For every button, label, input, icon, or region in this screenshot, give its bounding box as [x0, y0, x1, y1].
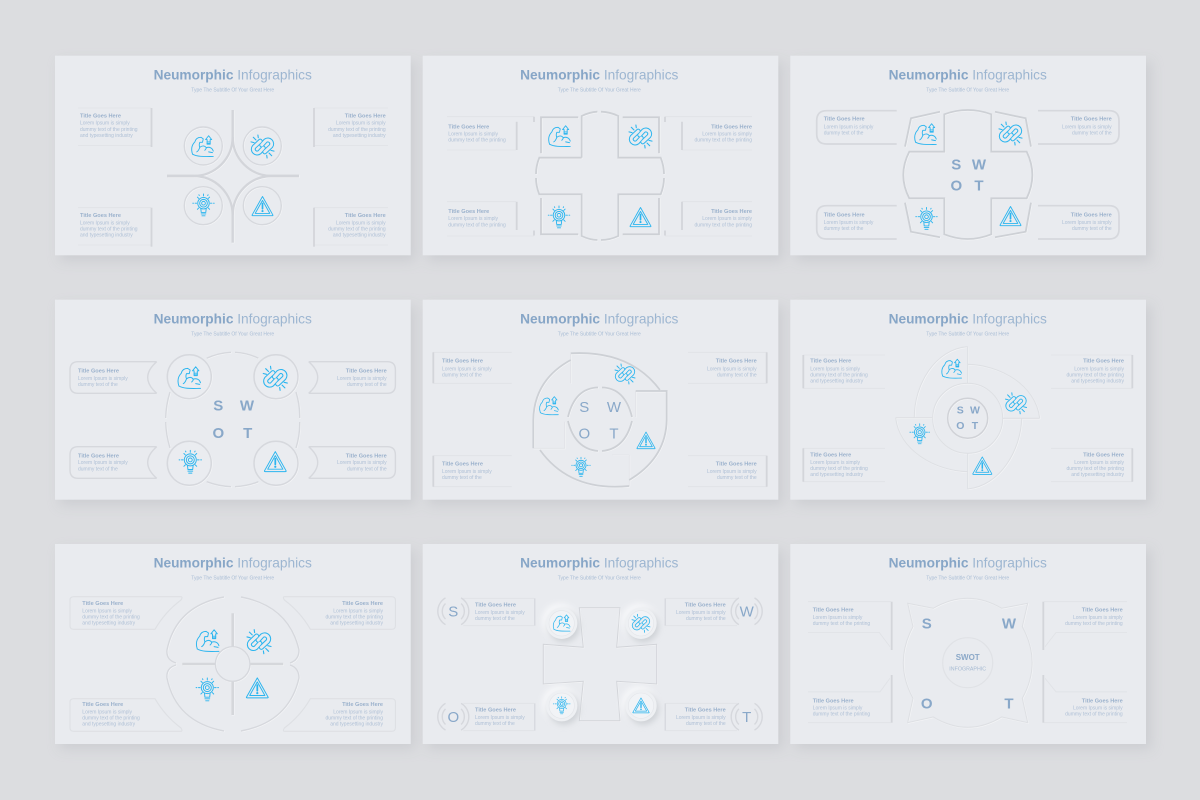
SWOT letters: O [921, 696, 933, 712]
text card: top right: dummy text of the printing [328, 127, 386, 133]
text card: bottom right: Lorem Ipsum is simply [702, 216, 752, 222]
text card: top left: Title Goes Here [442, 359, 483, 365]
SWOT letters [212, 398, 255, 442]
icon: muscle [540, 397, 558, 415]
text card: bottom left: dummy text of the [824, 226, 864, 232]
SWOT letters: T [609, 426, 619, 442]
center hub: INFOGRAPHIC [949, 666, 986, 672]
text card: bottom left: and typesetting industry [810, 472, 864, 478]
text card: top right [1043, 602, 1127, 650]
text card: bottom left: dummy text of the printing [82, 716, 140, 722]
text card: top right [283, 597, 395, 629]
text card: bottom left: dummy text of the [442, 475, 482, 481]
diagram: flared cross [543, 608, 657, 721]
button: bottom left [542, 686, 580, 725]
text card: top left: and typesetting industry [80, 133, 133, 139]
text card: top right: dummy text of the printing [1065, 621, 1123, 627]
heading: slide 3: Neumorphic Infographics [889, 68, 1047, 82]
text card: top left: Title Goes Here [813, 608, 854, 614]
text card: bottom left: Title Goes Here [810, 453, 851, 459]
text card: top right: Lorem Ipsum is simply [1073, 615, 1123, 621]
text card: bottom right [1051, 448, 1132, 482]
slide drop shadows [60, 62, 1151, 749]
letter badge: S [438, 598, 469, 625]
text card: top right [688, 352, 767, 383]
text card: bottom left [808, 675, 892, 723]
icon: idea bulb [916, 208, 937, 229]
letter badge: O: O [447, 709, 459, 726]
text card: top right: dummy text of the [347, 382, 387, 388]
text card: bottom right: dummy text of the printing [1066, 466, 1124, 472]
diagram: rounded cross with corner wedges [903, 110, 1032, 239]
text card: top left: dummy text of the printing [810, 372, 868, 378]
text card: top right: Title Goes Here [685, 603, 726, 609]
text card: bottom left [70, 699, 182, 731]
text card: top left: Title Goes Here [475, 603, 516, 609]
text card: bottom right: Lorem Ipsum is simply [337, 460, 387, 466]
text card: bottom right: Title Goes Here [711, 209, 752, 215]
text card: top right: and typesetting industry [1071, 378, 1124, 384]
letter badge: T: T [742, 709, 751, 726]
panel: slide 3 SWOT cross with wedges [790, 56, 1146, 255]
text card: bottom left: Lorem Ipsum is simply [78, 460, 128, 466]
text card: bottom right: Lorem Ipsum is simply [676, 715, 726, 721]
icon: warning [637, 432, 655, 449]
text card: top left: dummy text of the [78, 382, 118, 388]
text card: top left [433, 352, 512, 383]
icon: muscle [915, 124, 936, 145]
text card: bottom left [463, 703, 535, 731]
panel: slide 1 quarter-arc cross [55, 56, 411, 255]
SWOT letters [578, 399, 622, 442]
SWOT letters: T [243, 425, 252, 442]
text card: bottom left: Lorem Ipsum is simply [82, 710, 133, 716]
letter badge: T [731, 703, 762, 730]
text card: top left: dummy text of the printing [80, 127, 138, 133]
heading: slide 1: Neumorphic Infographics [154, 68, 312, 82]
icon: muscle [192, 136, 213, 157]
SWOT letters: O [578, 426, 590, 442]
text card: bottom right: dummy text of the [1072, 226, 1112, 232]
text card: bottom right: Title Goes Here [345, 213, 386, 219]
text card: bottom left: Title Goes Here [475, 708, 516, 714]
subtitle: slide 4: Type The Subtitle Of Your Great Here [191, 332, 274, 338]
letter badge: S: S [448, 604, 458, 621]
text card: bottom right [1043, 675, 1127, 723]
SWOT letters: W [607, 399, 622, 416]
panel: slide 7 divided circle [55, 544, 411, 744]
text card: top left: and typesetting industry [82, 620, 136, 626]
heading: slide 8: Neumorphic Infographics [520, 556, 679, 570]
text card: top left: Lorem Ipsum is simply [810, 366, 861, 372]
text card: top right: dummy text of the printing [1066, 372, 1124, 378]
text card: top right [1038, 111, 1119, 144]
text card: top right: Lorem Ipsum is simply [336, 121, 386, 127]
text card: bottom right [309, 447, 395, 478]
text card: top right: and typesetting industry [330, 620, 383, 626]
icon: warning [630, 208, 651, 227]
text card: bottom right: Title Goes Here [1071, 212, 1112, 218]
text card: bottom right: Title Goes Here [1082, 698, 1123, 704]
text card: bottom right: Title Goes Here [342, 702, 383, 708]
text card: bottom right: Title Goes Here [716, 462, 757, 468]
text card: top right: Lorem Ipsum is simply [676, 610, 726, 616]
text card: bottom right [314, 208, 388, 247]
diagram: cross outline and corner squares [536, 112, 664, 240]
text card: top right: Lorem Ipsum is simply [1062, 125, 1112, 131]
text card: top left [808, 602, 892, 650]
SWOT letters: W [972, 156, 987, 174]
icon: idea bulb [572, 457, 590, 476]
SWOT letters: W [1002, 616, 1017, 632]
SWOT letters: T [972, 420, 979, 432]
text card: top right: Title Goes Here [711, 124, 752, 130]
panel: slide 2 cross with square corners [423, 56, 778, 255]
text card: bottom right: Lorem Ipsum is simply [1062, 220, 1112, 226]
center hub [943, 638, 993, 688]
text card: top right: dummy text of the [717, 372, 757, 378]
text card: top left [78, 108, 152, 147]
text card: top right: Title Goes Here [1071, 117, 1112, 123]
text card: bottom left: Title Goes Here [82, 702, 123, 708]
text card: top right: Title Goes Here [1083, 359, 1124, 365]
text card: bottom left: Title Goes Here [442, 462, 483, 468]
text card: top right [665, 598, 737, 626]
heading: slide 7: Neumorphic Infographics [154, 556, 312, 570]
text card: top right: and typesetting industry [333, 133, 386, 139]
diagram: four-point star circle [903, 598, 1032, 727]
text card: bottom left: dummy text of the [475, 721, 515, 727]
SWOT letters [921, 616, 1017, 712]
diagram: four quarter arcs [167, 110, 299, 243]
icon: idea bulb [193, 194, 214, 216]
text card: bottom right: and typesetting industry [333, 232, 386, 238]
subtitle: slide 5: Type The Subtitle Of Your Great Here [558, 332, 641, 338]
text card: bottom left: Lorem Ipsum is simply [442, 469, 492, 475]
SWOT letters: S [213, 398, 223, 414]
SWOT letters: S [951, 156, 961, 174]
icon: muscle [549, 126, 570, 147]
text card: top left: Lorem Ipsum is simply [448, 131, 499, 137]
button: top right [621, 603, 659, 642]
diagram: dome, cross bars and hub [167, 597, 299, 731]
text card: top right: Title Goes Here [1082, 608, 1123, 614]
subtitle: slide 2: Type The Subtitle Of Your Great Here [558, 88, 641, 94]
text card: top left: Lorem Ipsum is simply [82, 609, 133, 615]
text card: bottom left: dummy text of the printing [810, 466, 868, 472]
panel: slide 6 SWOT pinwheel [790, 300, 1146, 500]
text card: bottom right: and typesetting industry [330, 721, 383, 727]
icon: broken link [615, 364, 635, 384]
text card: top right [665, 117, 752, 150]
text card: bottom right: dummy text of the [717, 475, 757, 481]
icon: broken link [1006, 393, 1026, 414]
text card: bottom right [1038, 206, 1119, 239]
text card: top right: dummy text of the [686, 616, 726, 622]
text card: top left [70, 362, 157, 393]
SWOT letters: S [957, 404, 964, 416]
text card: top left: Lorem Ipsum is simply [78, 376, 128, 382]
icon: broken link [999, 122, 1022, 145]
letter badge: W [731, 598, 762, 625]
text card: top left: Lorem Ipsum is simply [442, 366, 492, 372]
text card: bottom left: dummy text of the printing [448, 222, 506, 228]
text card: bottom left [447, 202, 534, 236]
text card: bottom right: Title Goes Here [1083, 453, 1124, 459]
icon: broken link [263, 366, 287, 390]
text card: top left: Title Goes Here [82, 601, 123, 607]
text card: top left [817, 111, 897, 144]
text card: bottom right: Lorem Ipsum is simply [1073, 706, 1123, 712]
panel: slide 8 cross with raised buttons [423, 544, 778, 744]
text card: top left: Lorem Ipsum is simply [813, 615, 863, 621]
panel: slide 5 SWOT ring with offset segments [423, 300, 778, 500]
SWOT letters: T [974, 178, 984, 194]
text card: top left: Title Goes Here [810, 359, 851, 365]
text card: bottom right: dummy text of the printing [1065, 712, 1123, 718]
text card: bottom left [817, 206, 897, 239]
text card: bottom right [665, 703, 737, 731]
text card: top right: Title Goes Here [345, 114, 386, 120]
SWOT letters: S [922, 616, 932, 632]
text card: top right: dummy text of the [1072, 131, 1112, 137]
text card: top right: Title Goes Here [346, 369, 387, 375]
text card: bottom left: and typesetting industry [82, 721, 136, 727]
text card: top right [309, 362, 395, 393]
heading: slide 9: Neumorphic Infographics [889, 556, 1047, 570]
subtitle: slide 3: Type The Subtitle Of Your Great Here [926, 88, 1009, 94]
text card: bottom left: and typesetting industry [80, 232, 133, 238]
icon: idea bulb [196, 678, 218, 701]
icon: warning [246, 678, 268, 698]
text card: bottom right: dummy text of the printing [328, 226, 386, 232]
text card: top left: dummy text of the [824, 131, 864, 137]
text card: bottom right: Lorem Ipsum is simply [336, 220, 386, 226]
letter badge: W: W [740, 604, 755, 621]
icon: muscle [178, 367, 200, 388]
text card: bottom right: dummy text of the printing [325, 716, 383, 722]
text card: bottom left: Lorem Ipsum is simply [475, 715, 525, 721]
text card: top left [70, 597, 182, 629]
text card: bottom left: dummy text of the printing [80, 226, 138, 232]
text card: top right: Lorem Ipsum is simply [337, 376, 387, 382]
center hub: SWOT [956, 653, 980, 662]
text card: bottom right: dummy text of the [347, 466, 387, 472]
SWOT letters: W [970, 404, 980, 416]
heading: slide 6: Neumorphic Infographics [889, 312, 1047, 326]
text card: bottom left: dummy text of the printing [813, 712, 870, 718]
text card: top left [463, 598, 535, 626]
text card: bottom right: dummy text of the printing [694, 222, 752, 228]
text card: bottom right: dummy text of the [686, 721, 726, 727]
text card: bottom right: Lorem Ipsum is simply [333, 710, 383, 716]
text card: bottom right: Title Goes Here [685, 708, 726, 714]
text card: top left: Title Goes Here [80, 114, 121, 120]
subtitle: slide 8: Type The Subtitle Of Your Great Here [558, 576, 641, 582]
text card: bottom right [688, 456, 767, 487]
text card: top right: dummy text of the printing [694, 138, 752, 144]
text card: bottom left [433, 456, 512, 487]
icon: warning [264, 452, 286, 472]
SWOT letters [950, 156, 987, 194]
icon: idea bulb [910, 424, 930, 444]
text card: top left [803, 355, 885, 388]
text card: bottom left: Lorem Ipsum is simply [448, 216, 499, 222]
text card: bottom left: Lorem Ipsum is simply [810, 460, 861, 466]
text card: bottom left: Title Goes Here [80, 213, 121, 219]
button: top left [542, 603, 580, 642]
SWOT letters [956, 404, 980, 432]
text card: top right: Lorem Ipsum is simply [707, 366, 757, 372]
panel: slide 9 SWOT star circle [790, 544, 1146, 744]
icon: warning [973, 457, 992, 474]
text card: bottom right: Lorem Ipsum is simply [707, 469, 757, 475]
text card: top right: Lorem Ipsum is simply [1074, 366, 1124, 372]
text card: bottom right: and typesetting industry [1071, 472, 1124, 478]
text card: top right: dummy text of the printing [325, 615, 383, 621]
icon: broken link [251, 135, 274, 158]
text card: top right [1051, 355, 1132, 388]
diagram: blob with four corner circles [166, 352, 300, 487]
text card: top left: dummy text of the [475, 616, 515, 622]
text card: top right: Title Goes Here [716, 359, 757, 365]
text card: bottom left: Title Goes Here [813, 698, 854, 704]
icon: warning [252, 197, 273, 216]
text card: bottom left: Lorem Ipsum is simply [80, 220, 130, 226]
text card: bottom left: dummy text of the [78, 466, 118, 472]
SWOT letters: W [240, 398, 255, 414]
text card: bottom left: Lorem Ipsum is simply [813, 706, 863, 712]
icon: broken link [629, 125, 652, 148]
diagram: pinwheel blades and hub [896, 347, 1040, 489]
text card: top left: Lorem Ipsum is simply [80, 121, 130, 127]
text card: top left: Title Goes Here [78, 369, 119, 375]
icon: idea bulb [548, 206, 570, 228]
subtitle: slide 9: Type The Subtitle Of Your Great Here [926, 576, 1009, 582]
heading: slide 4: Neumorphic Infographics [154, 312, 312, 326]
icon: idea bulb [179, 450, 202, 473]
text card: top left: and typesetting industry [810, 378, 864, 384]
text card: top left: Title Goes Here [448, 124, 489, 130]
text card: top left: dummy text of the printing [448, 138, 506, 144]
text card: bottom right: Title Goes Here [346, 453, 387, 459]
icon: warning [1000, 207, 1021, 226]
text card: top left: dummy text of the [442, 372, 482, 378]
SWOT letters: T [1004, 696, 1014, 712]
heading: slide 2: Neumorphic Infographics [520, 68, 679, 82]
text card: bottom left: Title Goes Here [78, 453, 119, 459]
subtitle: slide 6: Type The Subtitle Of Your Great Here [926, 332, 1009, 338]
subtitle: slide 1: Type The Subtitle Of Your Great Here [191, 88, 274, 94]
text card: bottom left [78, 208, 152, 247]
text card: top left: Title Goes Here [824, 117, 865, 123]
text card: top right: Lorem Ipsum is simply [333, 609, 383, 615]
icon: muscle [196, 630, 219, 651]
text card: top right: Lorem Ipsum is simply [702, 131, 752, 137]
button: bottom right [621, 686, 659, 725]
text card: bottom left: Title Goes Here [448, 209, 489, 215]
text card: top left: Lorem Ipsum is simply [475, 610, 525, 616]
panel: slide 4 SWOT blob with circles [55, 300, 411, 500]
text card: top right [314, 108, 388, 147]
SWOT letters: S [579, 399, 589, 416]
text card: top left: dummy text of the printing [813, 621, 870, 627]
text card: bottom right [665, 202, 752, 236]
text card: top left: dummy text of the printing [82, 615, 140, 621]
SWOT letters: O [950, 178, 962, 194]
icon: broken link [247, 630, 271, 654]
SWOT letters: O [956, 420, 964, 432]
subtitle: slide 7: Type The Subtitle Of Your Great Here [191, 576, 274, 582]
heading: slide 5: Neumorphic Infographics [520, 312, 679, 326]
letter badge: O [438, 703, 469, 730]
SWOT letters: O [212, 425, 224, 442]
text card: top right: Title Goes Here [342, 601, 383, 607]
text card: top left: Lorem Ipsum is simply [824, 125, 874, 131]
text card: top left [447, 117, 534, 150]
text card: bottom left [70, 447, 157, 478]
diagram: outer ring segments [533, 353, 667, 487]
text card: bottom right [283, 699, 395, 731]
text card: bottom left [803, 448, 885, 482]
icon: muscle [942, 359, 962, 378]
text card: bottom left: Lorem Ipsum is simply [824, 220, 874, 226]
text card: bottom right: Lorem Ipsum is simply [1074, 460, 1124, 466]
text card: bottom left: Title Goes Here [824, 212, 865, 218]
